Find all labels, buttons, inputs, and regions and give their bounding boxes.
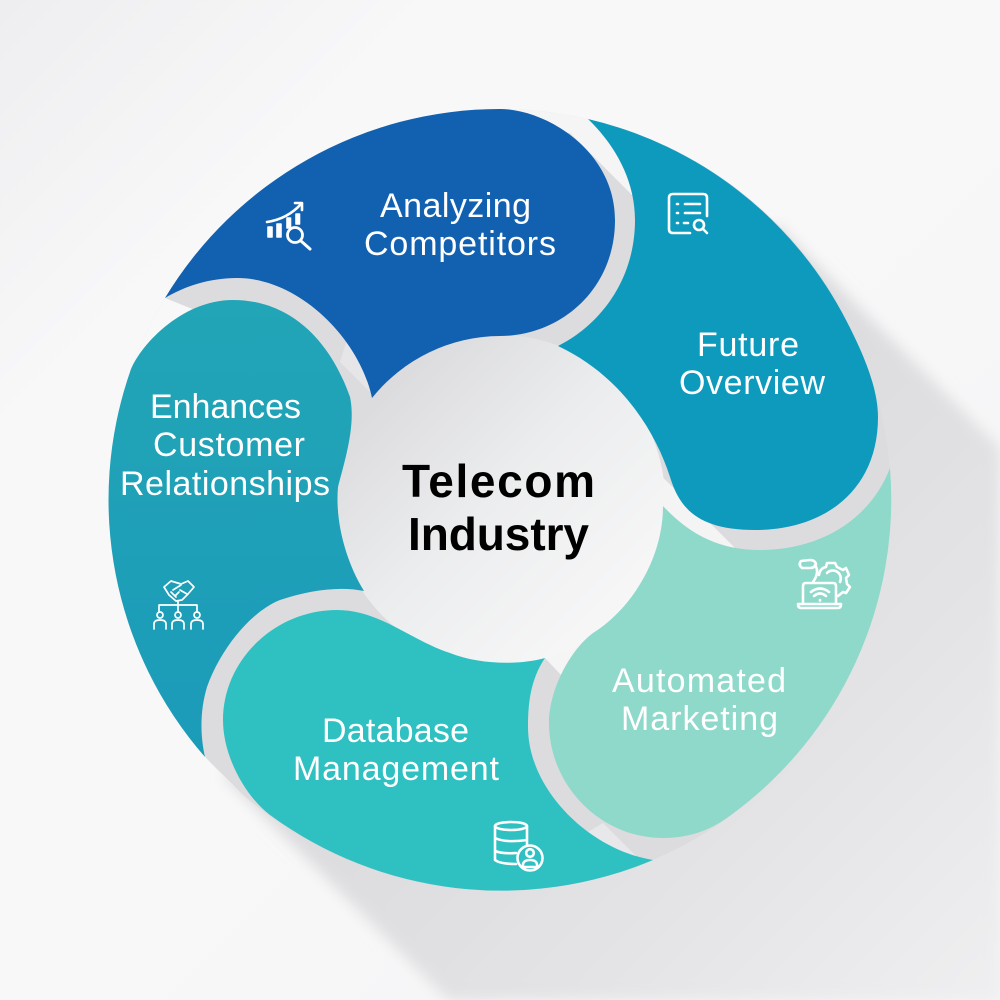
heading: Future Overview: Future [697,326,799,364]
panel: Database Management [223,610,653,891]
panel: Enhances Customer Relationships [109,300,364,757]
heading: Automated Marketing: Automated [612,662,786,700]
petal: enhances [109,300,364,757]
heading: Enhances Customer Relationships: Relationships [120,465,330,503]
title: Telecom Industry [402,455,595,560]
heading: Enhances Customer Relationships: Customer [153,426,305,464]
heading: Automated Marketing: Marketing [621,700,778,738]
heading: Future Overview: Overview [679,364,825,402]
long shadow [224,224,1000,1000]
icon: laptop with wifi and gear [798,560,850,608]
disc backing [109,109,891,891]
petal: future [558,119,878,530]
heading: Future Overview [679,326,825,402]
icon: list with magnifier [669,194,707,233]
panel: Automated Marketing [549,468,891,838]
heading: Database Management: Database [322,712,469,750]
petal: automated [549,468,891,838]
panel: Analyzing Competitors [165,109,615,398]
heading: Enhances Customer Relationships: Enhances [150,388,301,426]
title: Telecom Industry: Telecom [402,455,595,507]
light gap areas [105,105,735,865]
heading: Database Management: Management [293,750,500,788]
petal: analyzing [165,109,615,398]
heading: Automated Marketing [612,662,786,738]
panel: Future Overview [558,119,878,530]
icon: handshake over team [154,581,203,629]
icon: chart with magnifier [267,203,310,249]
center circle [335,335,665,665]
icon: database with user [495,822,542,870]
heading: Analyzing Competitors [364,187,556,263]
heading: Enhances Customer Relationships [120,388,330,503]
petal: database [223,610,653,891]
title: Telecom Industry: Industry [408,508,589,560]
heading: Database Management [293,712,500,788]
heading: Analyzing Competitors: Competitors [364,225,556,263]
heading: Analyzing Competitors: Analyzing [380,187,531,225]
